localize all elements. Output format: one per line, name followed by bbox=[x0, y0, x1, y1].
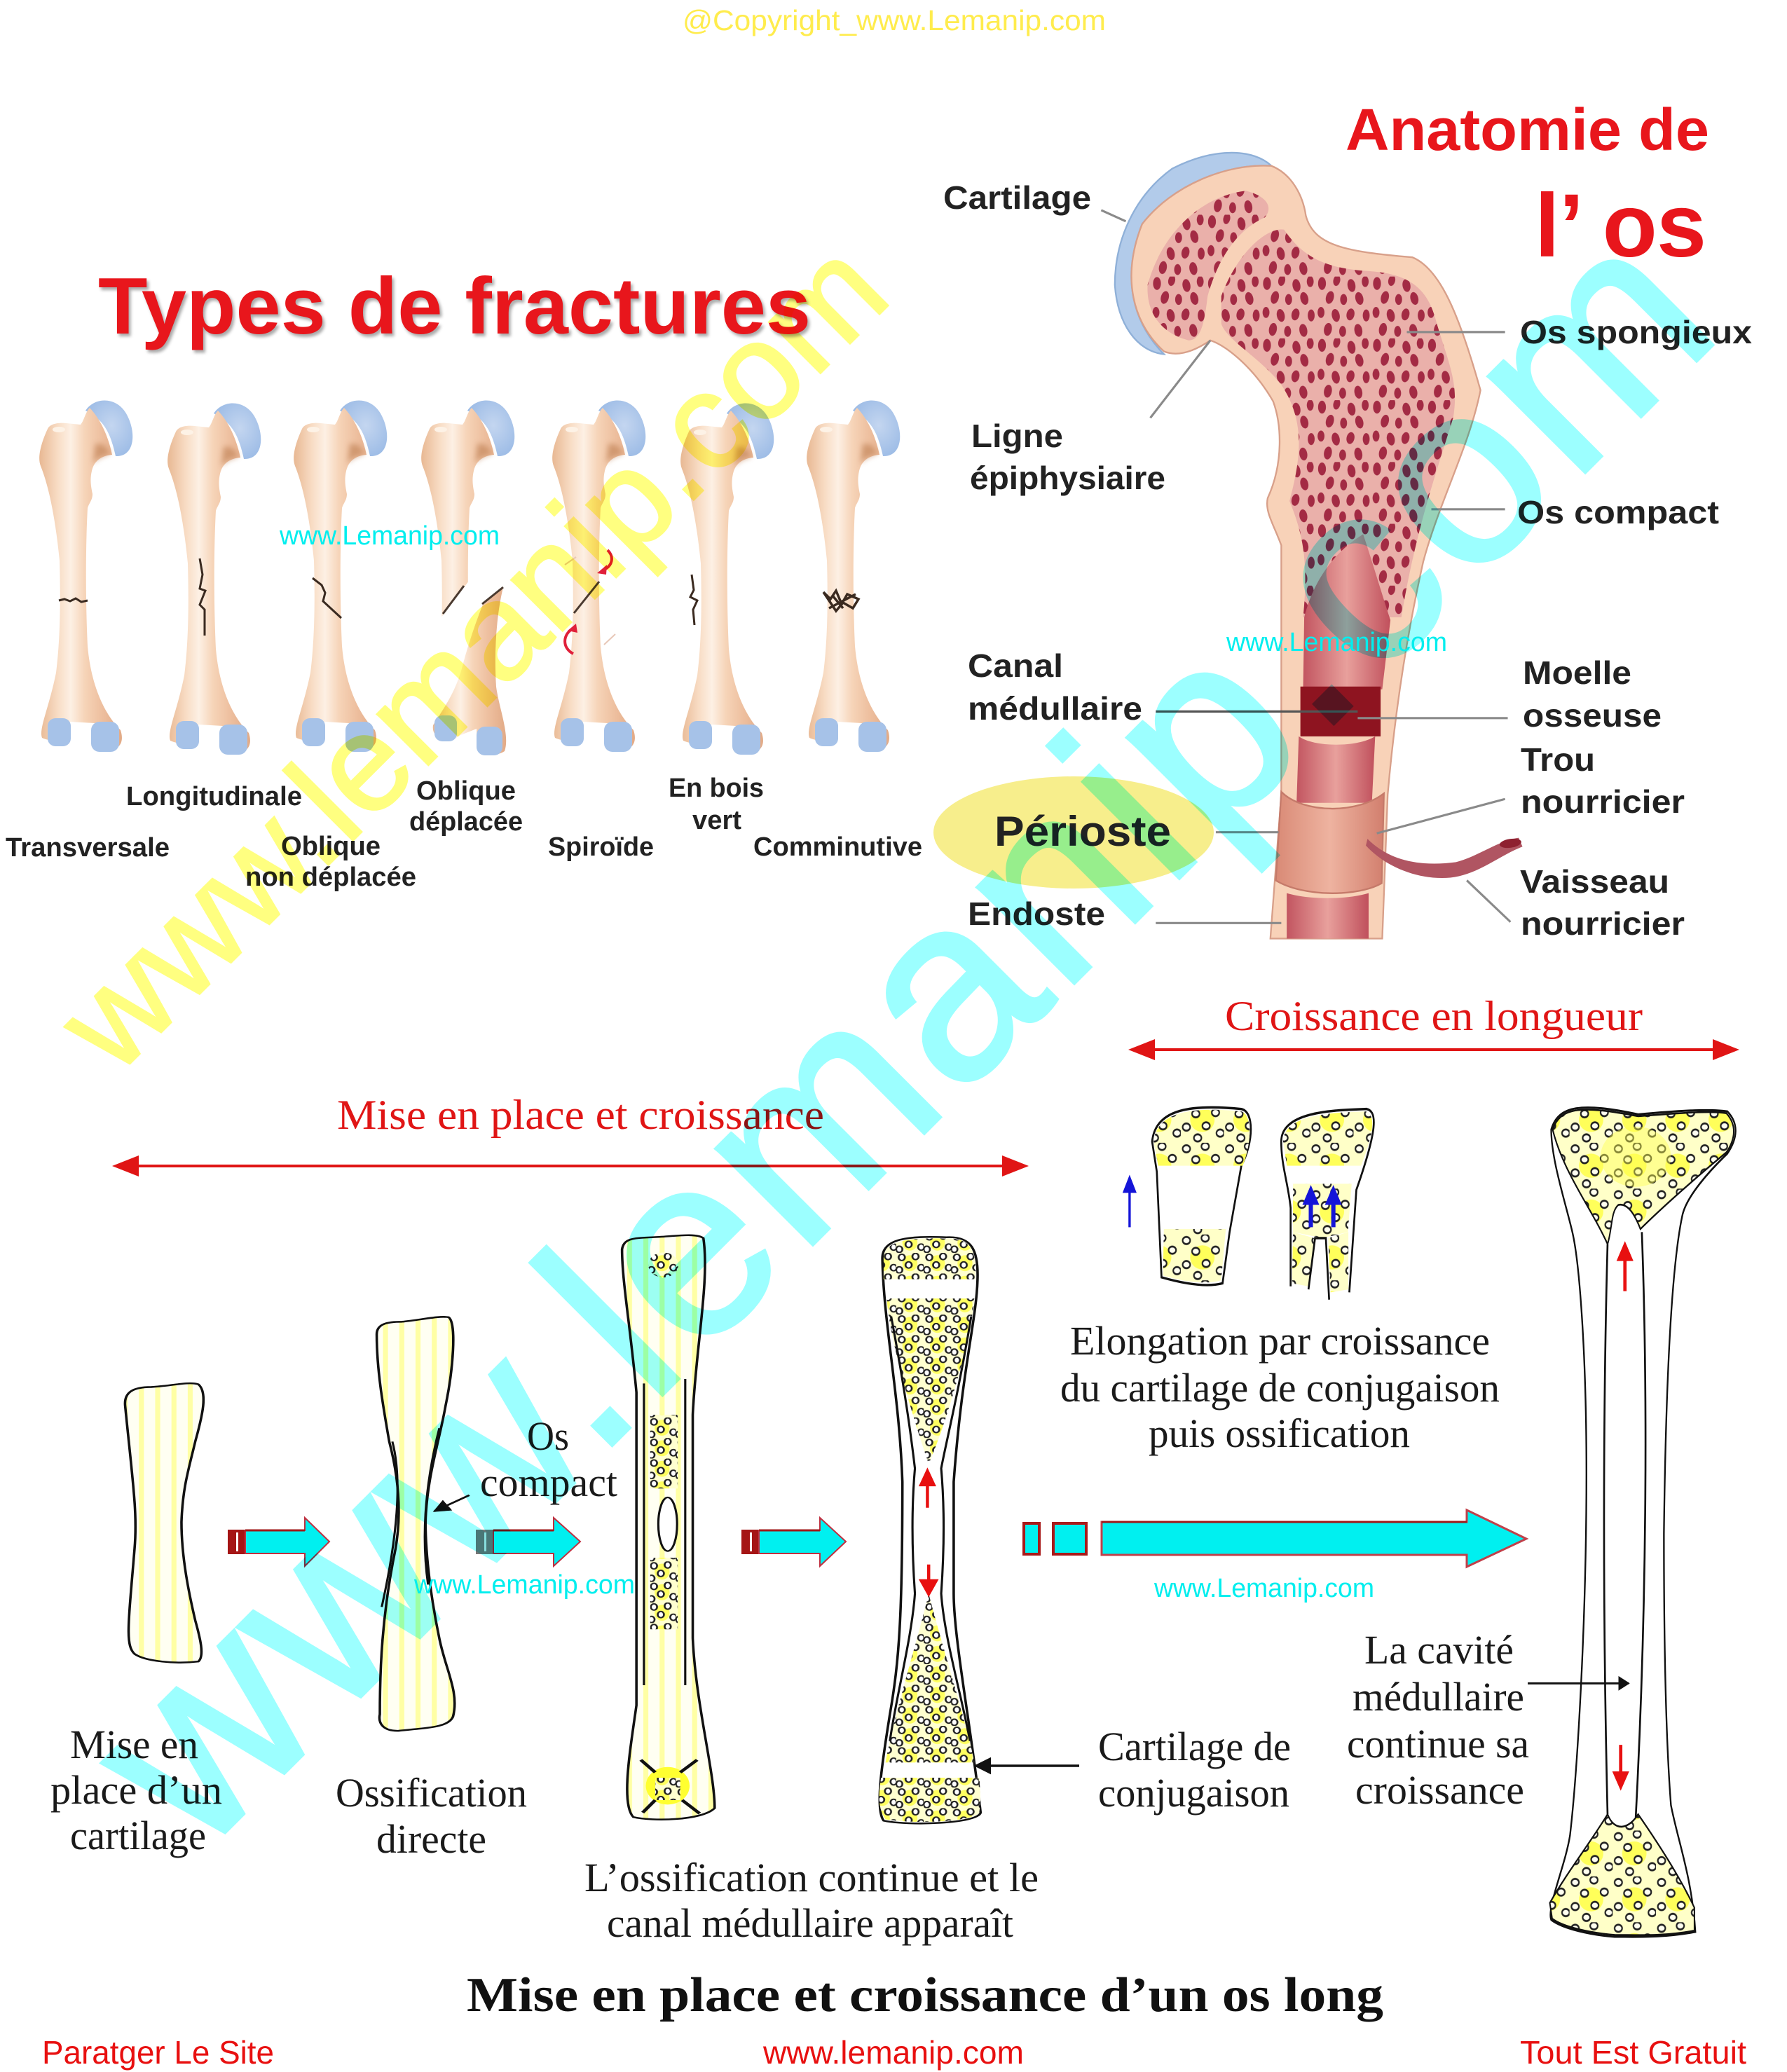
title: anatomie de l'os: l’ os bbox=[1535, 176, 1706, 276]
arrow: cartilage de conjugaison pointer bbox=[975, 1764, 1079, 1767]
bone stage 4: conjugation cartilage bbox=[879, 1237, 980, 1823]
arrow: stage 3 to 4 bbox=[741, 1518, 846, 1566]
fracture labels: Transversale bbox=[6, 833, 170, 863]
canal lower cylinder bbox=[1296, 736, 1375, 803]
caption: ossification directe bbox=[336, 1770, 527, 1862]
anatomy labels: Ligne bbox=[971, 418, 1063, 454]
arrow: os compact pointer bbox=[434, 1495, 470, 1511]
endosteum tube bbox=[1287, 893, 1369, 938]
anatomy labels: Cartilage bbox=[943, 179, 1091, 216]
caption: mise en place d'un cartilage: cartilage bbox=[70, 1813, 206, 1858]
arrow: long growth bbox=[1024, 1510, 1526, 1567]
arrow: medullary cavity pointer bbox=[1528, 1682, 1629, 1685]
caption: cavite medullaire: continue sa bbox=[1347, 1721, 1529, 1766]
small watermark 3: www.Lemanip.com bbox=[413, 1570, 635, 1600]
heading: mise en place et croissance: Mise en place et croissance bbox=[337, 1092, 824, 1138]
large long bone bbox=[1550, 1108, 1736, 1937]
bone marrow band bbox=[1301, 687, 1381, 736]
caption: elongation: Elongation par croissance bbox=[1070, 1318, 1490, 1364]
small watermark 2: www.Lemanip.com bbox=[1226, 628, 1447, 657]
heading: croissance en longueur: Croissance en longueur bbox=[1225, 993, 1643, 1039]
fracture labels: Longitudinale bbox=[126, 782, 302, 811]
blue growth arrows bbox=[1123, 1175, 1342, 1227]
femur: en bois vert bbox=[680, 403, 774, 755]
bone stage 3: continued ossification bbox=[622, 1235, 715, 1820]
caption: cavite medullaire: La cavité bbox=[1364, 1627, 1514, 1673]
title: types de fractures: Types de fractures bbox=[98, 262, 811, 351]
large yellow watermark: www.lemanip.com bbox=[28, 212, 915, 1099]
femur: longitudinale bbox=[167, 403, 261, 755]
anatomy labels: épiphysiaire bbox=[970, 460, 1165, 496]
title: anatomie de l'os: Anatomie de bbox=[1346, 97, 1709, 163]
caption: os compact: Os bbox=[527, 1413, 569, 1459]
fracture labels: vert bbox=[692, 806, 741, 835]
anatomy labels: Canal bbox=[968, 647, 1063, 684]
leader lines bbox=[1101, 210, 1510, 923]
caption: ossification continue: L’ossification continue et le bbox=[584, 1855, 1039, 1900]
anatomy labels: nourricier bbox=[1521, 905, 1685, 942]
caption: mise en place d'un cartilage: Mise en bbox=[70, 1722, 198, 1767]
fracture labels: Oblique bbox=[416, 776, 516, 806]
anatomy labels: Os spongieux bbox=[1520, 314, 1752, 350]
anatomy labels: Os compact bbox=[1517, 494, 1719, 530]
anatomy labels: Trou bbox=[1521, 741, 1595, 778]
caption: ossification continue: canal médullaire apparaît bbox=[607, 1900, 1013, 1946]
caption: elongation: puis ossification bbox=[1149, 1411, 1410, 1456]
caption: elongation: du cartilage de conjugaison bbox=[1060, 1365, 1500, 1411]
anatomy labels: nourricier bbox=[1521, 783, 1685, 820]
spongy bone neck bbox=[1221, 229, 1455, 617]
highlight ellipse: perioste bbox=[933, 776, 1214, 889]
large cyan watermark: www.lemanip.com bbox=[30, 168, 1765, 1902]
caption: os compact: compact bbox=[480, 1460, 617, 1505]
caption: cavite medullaire: croissance bbox=[1355, 1767, 1524, 1813]
anatomy labels: Périoste bbox=[994, 808, 1171, 855]
arrow: stage 1 to 2 bbox=[228, 1518, 329, 1566]
caption: os compact bbox=[480, 1413, 617, 1505]
panel: bone development stages bbox=[125, 1235, 980, 1823]
bone body bbox=[1132, 165, 1481, 938]
copyright line: @Copyright_www.Lemanip.com bbox=[683, 4, 1106, 36]
anatomy labels: Endoste bbox=[968, 896, 1105, 932]
femur: oblique deplacee bbox=[421, 400, 514, 755]
bone stage 1: cartilage bbox=[125, 1383, 203, 1663]
caption: ossification directe: directe bbox=[376, 1816, 486, 1862]
main bottom title: Mise en place et croissance d’un os long bbox=[467, 1968, 1383, 2022]
spongy bone head bbox=[1147, 191, 1268, 341]
caption: cartilage de conjugaison bbox=[1098, 1724, 1291, 1816]
small bone: during elongation bbox=[1281, 1109, 1374, 1300]
arrow: stage 2 to 3 bbox=[476, 1518, 580, 1566]
panel: length growth bones bbox=[1123, 1107, 1736, 1937]
caption: cavite medullaire: médullaire bbox=[1353, 1674, 1524, 1720]
fracture labels: non déplacée bbox=[245, 863, 416, 892]
caption: ossification directe: Ossification bbox=[336, 1770, 527, 1816]
small watermark 4: www.Lemanip.com bbox=[1153, 1574, 1374, 1603]
caption: cartilage de conjugaison: conjugaison bbox=[1098, 1770, 1289, 1816]
medullary canal bbox=[1303, 534, 1390, 689]
small watermark 1: www.Lemanip.com bbox=[279, 521, 500, 551]
femur: oblique non deplacee bbox=[294, 400, 387, 752]
periosteum sleeve bbox=[1276, 792, 1384, 893]
title: anatomie de l'os bbox=[1346, 97, 1709, 276]
footer center: www.lemanip.com bbox=[762, 2034, 1024, 2071]
fracture labels bbox=[6, 774, 922, 892]
femur: comminutive bbox=[807, 400, 900, 752]
caption: cavite medullaire bbox=[1347, 1627, 1529, 1813]
femur: transversale bbox=[39, 400, 132, 752]
anatomy labels: Vaisseau bbox=[1520, 863, 1669, 900]
fracture labels: Comminutive bbox=[753, 832, 922, 862]
fracture labels: Spiroïde bbox=[548, 832, 654, 862]
footer left: Paratger Le Site bbox=[42, 2034, 274, 2071]
anatomy labels: osseuse bbox=[1523, 697, 1662, 734]
caption: cartilage de conjugaison: Cartilage de bbox=[1098, 1724, 1291, 1769]
diagram: bone anatomy bbox=[1101, 153, 1523, 938]
caption: elongation bbox=[1060, 1318, 1500, 1456]
anatomy labels: médullaire bbox=[968, 690, 1142, 727]
caption: ossification continue bbox=[584, 1855, 1039, 1946]
nutrient vessel bbox=[1366, 837, 1523, 878]
fracture labels: Oblique bbox=[281, 832, 381, 861]
panel: fracture femurs bbox=[39, 400, 900, 755]
footer right: Tout Est Gratuit bbox=[1520, 2034, 1746, 2071]
small bone: before elongation bbox=[1152, 1107, 1251, 1285]
femur: spiroide bbox=[552, 400, 645, 752]
anatomy labels bbox=[943, 179, 1752, 942]
caption: mise en place d'un cartilage: place d’un bbox=[50, 1767, 222, 1813]
bone stage 2: direct ossification bbox=[377, 1317, 455, 1731]
fracture labels: déplacée bbox=[409, 807, 523, 837]
caption: mise en place d'un cartilage bbox=[50, 1722, 222, 1858]
fracture labels: En bois bbox=[669, 774, 764, 803]
anatomy labels: Moelle bbox=[1523, 654, 1631, 691]
heading: mise en place et croissance bbox=[112, 1092, 1029, 1176]
cartilage cap bbox=[1115, 153, 1271, 354]
heading: croissance en longueur bbox=[1128, 993, 1739, 1060]
